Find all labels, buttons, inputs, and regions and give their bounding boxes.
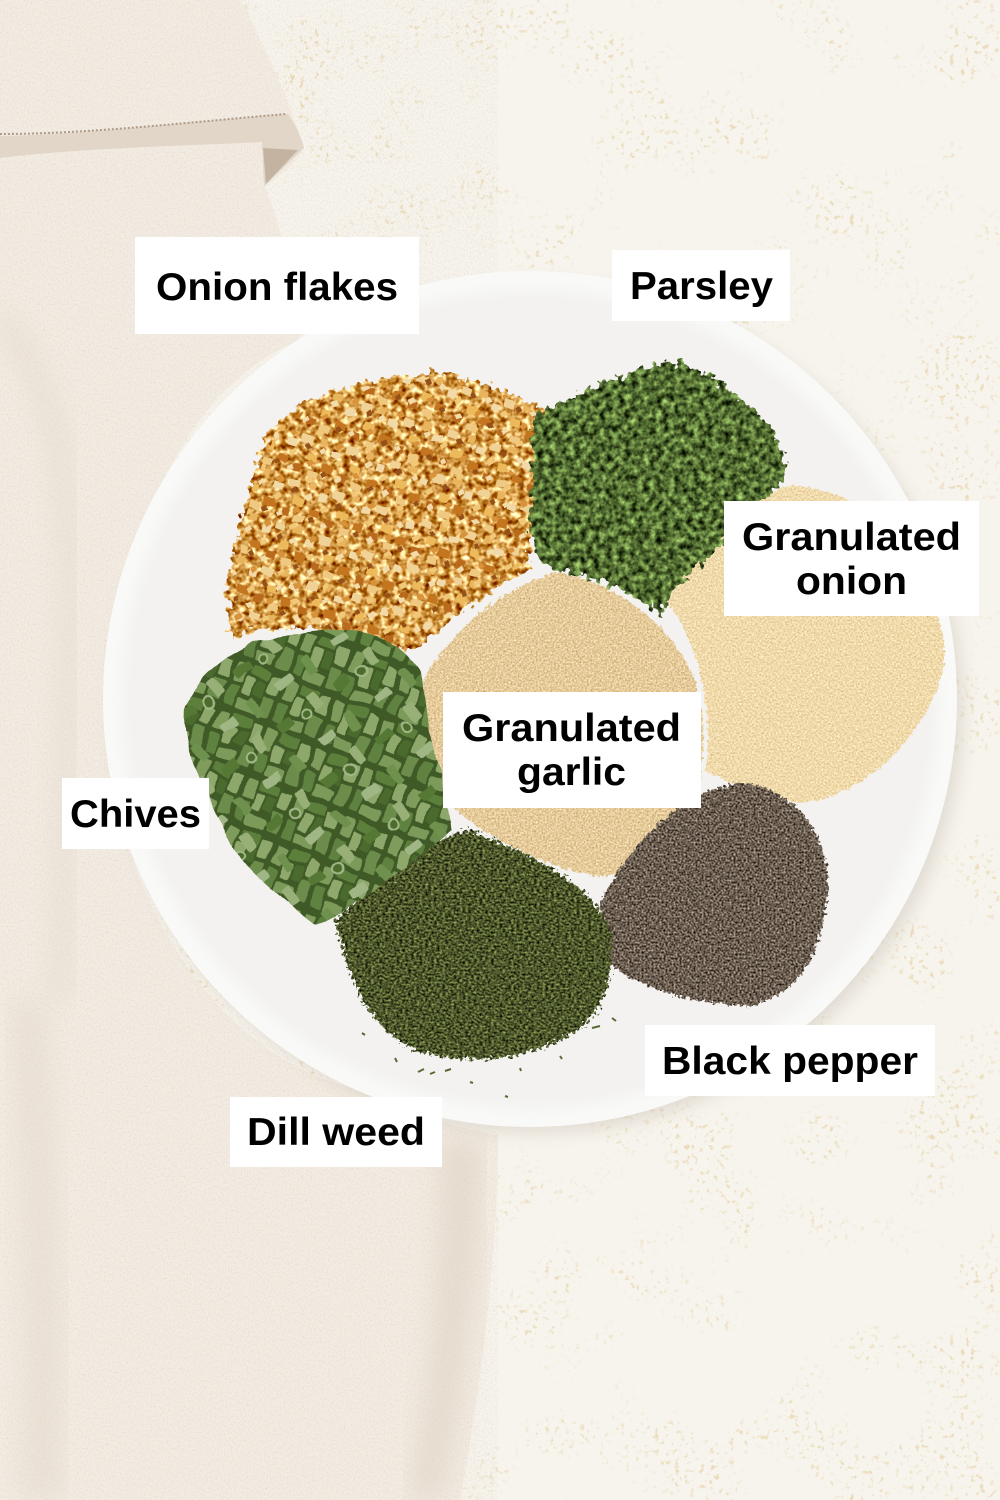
label: granulated garlic: Granulated: [462, 707, 681, 750]
cloth hem stitching: [0, 114, 304, 186]
label: chives: Chives: [70, 793, 201, 836]
label: chives: [62, 778, 209, 849]
spice: dill weed: [335, 830, 616, 1097]
cloth folds: [10, 1000, 63, 1500]
label: dill weed: Dill weed: [247, 1111, 425, 1154]
label: granulated garlic: garlic: [517, 751, 626, 794]
label: parsley: [612, 250, 790, 321]
spice: granulated onion: [665, 485, 944, 803]
label: dill weed: [230, 1097, 442, 1167]
label: black pepper: [645, 1025, 935, 1096]
label: granulated garlic: [443, 692, 701, 808]
linen cloth: [0, 0, 498, 1500]
label: onion flakes: [135, 237, 419, 334]
plate: [103, 271, 962, 1132]
label: granulated onion: onion: [796, 560, 907, 603]
spice: parsley: [530, 362, 784, 615]
label: granulated onion: Granulated: [742, 516, 961, 559]
spice: chives: [185, 629, 452, 925]
label: parsley: Parsley: [630, 265, 773, 308]
spice: granulated garlic: [421, 572, 703, 876]
dill crumbs: [362, 1018, 616, 1097]
spice: black pepper: [600, 783, 828, 1006]
label: black pepper: Black pepper: [662, 1040, 918, 1083]
label: granulated onion: [724, 501, 979, 616]
label: onion flakes: Onion flakes: [156, 266, 398, 309]
spice: onion flakes: [226, 373, 555, 650]
